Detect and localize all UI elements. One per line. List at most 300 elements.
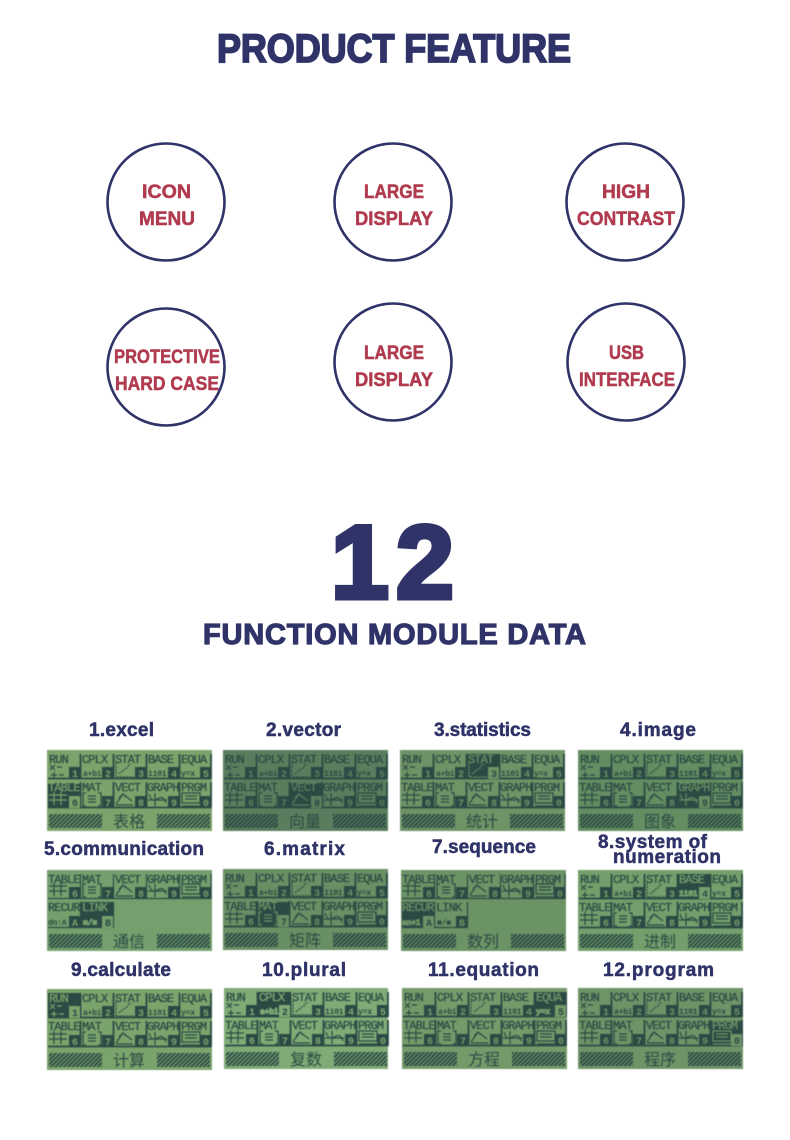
screen 8: system of numeration: 4 <box>702 890 708 901</box>
screen 9: calculate: 9 <box>171 1038 177 1049</box>
screen 10: plural: a+bi <box>260 1008 279 1017</box>
screen 3: statistics: 0 <box>556 799 562 810</box>
screen 7: sequence: B <box>459 919 465 930</box>
screen 11: equation: BASE <box>503 991 529 1005</box>
feature circle: protective hard case: HARD CASE <box>115 374 219 395</box>
caption 8: numeration <box>613 847 721 868</box>
screen 12: program: GRAPH <box>678 1019 710 1033</box>
screen 12: program: STAT <box>646 991 672 1005</box>
screen 8: system of numeration: 8 <box>669 919 675 930</box>
screen 1: excel: 4 <box>171 770 177 781</box>
screen 6: matrix: y=x <box>357 889 371 898</box>
screen 5: communication: ■/■ <box>83 919 97 928</box>
screen 7: sequence: TABLE <box>402 873 434 887</box>
feature circle: large display: LARGE <box>364 182 424 203</box>
screen 10: plural: STAT <box>292 991 318 1005</box>
screen 11: equation: VECT <box>470 1019 496 1033</box>
screen 9: calculate: 计算 <box>113 1051 145 1070</box>
big number 12: 1 <box>331 505 389 621</box>
screen 9: calculate: 8 <box>138 1038 144 1049</box>
screen 8: system of numeration: y=x <box>712 890 726 899</box>
screen 12: program: MAT <box>613 1019 633 1033</box>
screen 6: matrix: 矩阵 <box>289 932 321 950</box>
screen 1: excel: TABLE <box>48 781 80 795</box>
screen 10: plural: 4 <box>348 1008 354 1019</box>
screen 9: calculate: 3 <box>138 1009 144 1020</box>
screen 6: matrix: 9 <box>347 918 353 929</box>
screen 5: communication: B <box>105 919 111 930</box>
screen 10: plural: VECT <box>292 1019 318 1033</box>
caption 5: 5.communication <box>44 839 204 860</box>
screen 8: system of numeration: RUN <box>580 873 600 887</box>
screen 5: communication: PRGM <box>181 873 207 887</box>
subtitle: FUNCTION MODULE DATA <box>203 619 586 651</box>
screen 10: plural: 9 <box>348 1037 354 1048</box>
screen 12: program: PRGM <box>712 1019 738 1033</box>
screen 8: system of numeration: 5 <box>734 890 740 901</box>
screen 9: calculate: 1101 <box>148 1009 167 1018</box>
screen 11: equation: 方程 <box>468 1051 500 1069</box>
screen 6: matrix: GRAPH <box>323 900 355 914</box>
feature circle: high contrast <box>566 144 684 260</box>
screen 8: system of numeration: PRGM <box>712 901 738 915</box>
screen 1: excel: y=x <box>181 770 195 779</box>
screen 6: matrix: 7 <box>281 918 287 929</box>
screen 6: matrix: TABLE <box>224 900 256 914</box>
screen 1: excel: 6 <box>72 799 78 810</box>
screen 10: plural: 3 <box>315 1008 321 1019</box>
screen 9: calculate: 1 <box>72 1009 78 1020</box>
screen 8: system of numeration: 2 <box>636 890 642 901</box>
screen 9: calculate: PRGM <box>181 1020 207 1034</box>
screen 2: vector: STAT <box>291 753 317 767</box>
screen 3: statistics: 7 <box>458 799 464 810</box>
screen 4: image: CPLX <box>613 753 639 767</box>
feature circle: large display 2: LARGE <box>364 343 424 364</box>
screen 4: image: 5 <box>734 770 740 781</box>
screen 12: program: 6 <box>603 1037 609 1048</box>
screen 3: statistics: PRGM <box>534 781 560 795</box>
screen 6: matrix: 1101 <box>324 889 343 898</box>
screen 12: program: TABLE <box>579 1019 611 1033</box>
screen 11: equation: 3 <box>493 1008 499 1019</box>
screen 1: excel: GRAPH <box>147 781 179 795</box>
screen 11: equation: 1 <box>427 1008 433 1019</box>
caption 9: 9.calculate <box>71 960 171 981</box>
screen 11: equation: 2 <box>460 1008 466 1019</box>
screen 11: equation: MAT <box>437 1019 457 1033</box>
screen 6: matrix: 2 <box>281 889 287 900</box>
screen 3: statistics: EQUA <box>534 753 561 767</box>
screen 9: calculate: 4 <box>171 1009 177 1020</box>
screen 7: sequence: MAT <box>436 873 456 887</box>
screen 2: vector: 6 <box>248 799 254 810</box>
screen 8: system of numeration: GRAPH <box>678 901 710 915</box>
screen 6: matrix: BASE <box>324 872 350 886</box>
screen 1: excel: 7 <box>105 799 111 810</box>
screen 2: vector: 8 <box>314 799 320 810</box>
screen 11: equation: GRAPH <box>502 1019 534 1033</box>
screen 3: statistics: VECT <box>468 781 494 795</box>
screen 4: image: 1101 <box>679 770 698 779</box>
screen 2: vector: 9 <box>347 799 353 810</box>
screen 8: system of numeration: 7 <box>636 919 642 930</box>
screen 12: program: 4 <box>702 1008 708 1019</box>
screen 2: vector: MAT <box>258 781 278 795</box>
screen 11: equation: 5 <box>558 1008 564 1019</box>
caption 1: 1.excel <box>89 720 154 741</box>
screen 9: calculate: STAT <box>115 992 141 1006</box>
screen 12: program: EQUA <box>712 991 739 1005</box>
screen 9: calculate: 7 <box>105 1038 111 1049</box>
screen 12: program: 5 <box>734 1008 740 1019</box>
screen 11: equation: 4 <box>526 1008 532 1019</box>
screen 6: matrix: 4 <box>347 889 353 900</box>
caption 8: 8.system of <box>598 832 708 853</box>
screen 9: calculate: BASE <box>148 992 174 1006</box>
screen 12: program: y=x <box>712 1008 726 1017</box>
feature circle: icon menu <box>108 144 224 260</box>
feature circle: protective hard case: PROTECTIVE <box>114 347 220 368</box>
screen 4: image: 0 <box>734 799 740 810</box>
screen 11: equation: EQUA <box>536 991 563 1005</box>
screen 10: plural: 5 <box>380 1008 386 1019</box>
screen 7: sequence: PRGM <box>535 873 561 887</box>
screen 3: statistics: BASE <box>501 753 527 767</box>
screen 7: sequence: 数列 <box>467 933 499 951</box>
screen 1: excel: 0 <box>203 799 209 810</box>
screen 9: calculate: a+bi <box>83 1009 102 1018</box>
screen 1: excel: 3 <box>138 770 144 781</box>
screen 8: system of numeration: 1101 <box>679 890 698 899</box>
screen 7: sequence: A <box>426 919 432 930</box>
screen 7: sequence: an+1 <box>402 919 421 928</box>
screen 8: system of numeration: VECT <box>646 901 672 915</box>
screen 4: image: 8 <box>669 799 675 810</box>
screen 11: equation: a+bi <box>438 1008 457 1017</box>
screen 6: matrix: STAT <box>291 872 317 886</box>
screen 12: program: VECT <box>646 1019 672 1033</box>
screen 10: plural: CPLX <box>259 991 285 1005</box>
screen 4: image: GRAPH <box>678 781 710 795</box>
screen 4: image: 7 <box>636 799 642 810</box>
screen 6: matrix: EQUA <box>357 872 384 886</box>
screen 11: equation: 7 <box>460 1037 466 1048</box>
screen 5: communication: RECUR <box>48 901 80 915</box>
caption 8 <box>598 832 721 868</box>
screen 10: plural: EQUA <box>358 991 385 1005</box>
screen 11: equation: 0 <box>558 1037 564 1048</box>
screen 12: program: 7 <box>636 1037 642 1048</box>
screen 5: communication: GRAPH <box>147 873 179 887</box>
screen 8: system of numeration: 9 <box>702 919 708 930</box>
screen 7: sequence: VECT <box>469 873 495 887</box>
screen 6: matrix: a+bi <box>259 889 278 898</box>
screen 10: plural: 8 <box>315 1037 321 1048</box>
screen 7: sequence: RECUR <box>402 901 434 915</box>
screen 4: image: RUN <box>580 753 600 767</box>
screen 8: system of numeration: MAT <box>613 901 633 915</box>
feature circle: usb interface: INTERFACE <box>579 370 675 391</box>
feature circle: protective hard case <box>108 308 224 426</box>
screen 10: plural: 6 <box>249 1037 255 1048</box>
screen 9: calculate: 0 <box>203 1038 209 1049</box>
screen 8: system of numeration: STAT <box>646 873 672 887</box>
screen 2: vector: 1 <box>248 770 254 781</box>
screen 2: vector: GRAPH <box>323 781 355 795</box>
screen 4: image: 图象 <box>644 813 676 831</box>
screen 2: vector: a+bi <box>259 770 278 779</box>
screen 6: matrix <box>223 869 388 950</box>
screen 1: excel: 8 <box>138 799 144 810</box>
screen 2: vector: y=x <box>357 770 371 779</box>
screen 2: vector: EQUA <box>357 753 384 767</box>
screen 10: plural: 1101 <box>325 1008 344 1017</box>
screen 12: program: 3 <box>669 1008 675 1019</box>
screen 8: system of numeration: 进制 <box>644 933 676 951</box>
caption 12: 12.program <box>603 960 714 981</box>
screen 3: statistics: 1101 <box>501 770 520 779</box>
screen 8: system of numeration: 0 <box>734 919 740 930</box>
screen 11: equation: PRGM <box>536 1019 562 1033</box>
screen 3: statistics: 1 <box>425 770 431 781</box>
screen 12: program: CPLX <box>613 991 639 1005</box>
big number 12: 2 <box>396 505 454 621</box>
screen 6: matrix: PRGM <box>357 900 383 914</box>
screen 5: communication: LINK <box>82 901 109 915</box>
screen 6: matrix: 1 <box>248 889 254 900</box>
screen 10: plural: TABLE <box>225 1019 257 1033</box>
screen 11: equation: y=x <box>536 1008 550 1017</box>
screen 12: program: BASE <box>679 991 705 1005</box>
screen 7: sequence: ■/■ <box>437 919 451 928</box>
screen 5: communication: 7 <box>105 890 111 901</box>
caption 3: 3.statistics <box>434 720 531 741</box>
screen 11: equation: 1101 <box>503 1008 522 1017</box>
screen 11: equation: 9 <box>526 1037 532 1048</box>
screen 12: program: 程序 <box>644 1051 676 1069</box>
feature circle: usb interface <box>568 304 684 420</box>
screen 9: calculate: y=x <box>181 1009 195 1018</box>
screen 5: communication: VECT <box>115 873 141 887</box>
screen 12: program: 8 <box>669 1037 675 1048</box>
screen 9: calculate: GRAPH <box>147 1020 179 1034</box>
feature circle: large display <box>334 144 452 260</box>
screen 4: image: EQUA <box>712 753 739 767</box>
screen 7: sequence: 9 <box>525 890 531 901</box>
screen 1: excel: 表格 <box>113 813 145 831</box>
screen 1: excel: RUN <box>49 753 69 767</box>
screen 3: statistics: 9 <box>524 799 530 810</box>
screen 7: sequence: 0 <box>557 890 563 901</box>
screen 4: image: TABLE <box>579 781 611 795</box>
screen 2: vector <box>223 750 388 831</box>
feature circle: large display: DISPLAY <box>355 209 433 230</box>
screen 8: system of numeration <box>578 870 743 951</box>
screen 7: sequence: 7 <box>459 890 465 901</box>
screen 9: calculate: 6 <box>72 1038 78 1049</box>
screen 6: matrix: VECT <box>291 900 317 914</box>
screen 3: statistics: RUN <box>402 753 422 767</box>
screen 1: excel: 1101 <box>148 770 167 779</box>
screen 1: excel: MAT <box>82 781 102 795</box>
caption 6: 6.matrix <box>264 839 345 860</box>
screen 11: equation <box>402 988 567 1069</box>
screen 3: statistics: CPLX <box>435 753 461 767</box>
screen 2: vector: 向量 <box>289 813 321 831</box>
screen 10: plural: RUN <box>226 991 246 1005</box>
screen 5: communication: TABLE <box>48 873 80 887</box>
screen 12: program: a+bi <box>614 1008 633 1017</box>
screen 11: equation: CPLX <box>437 991 463 1005</box>
screen 4: image: 6 <box>603 799 609 810</box>
screen 2: vector: 7 <box>281 799 287 810</box>
screen 12: program: 1101 <box>679 1008 698 1017</box>
screen 5: communication: 8 <box>138 890 144 901</box>
screen 10: plural: BASE <box>325 991 351 1005</box>
screen 6: matrix: 6 <box>248 918 254 929</box>
screen 4: image <box>578 750 743 831</box>
screen 6: matrix: 8 <box>314 918 320 929</box>
screen 3: statistics: 统计 <box>466 813 498 831</box>
screen 12: program <box>578 988 743 1069</box>
screen 3: statistics: y=x <box>534 770 548 779</box>
screen 4: image: VECT <box>646 781 672 795</box>
screen 1: excel: STAT <box>115 753 141 767</box>
screen 3: statistics: 8 <box>491 799 497 810</box>
screen 2: vector: BASE <box>324 753 350 767</box>
screen 6: matrix: 5 <box>379 889 385 900</box>
screen 4: image: 4 <box>702 770 708 781</box>
screen 11: equation: RUN <box>404 991 424 1005</box>
screen 2: vector: CPLX <box>258 753 284 767</box>
screen 4: image: y=x <box>712 770 726 779</box>
screen 12: program: 2 <box>636 1008 642 1019</box>
screen 10: plural: PRGM <box>358 1019 384 1033</box>
screen 3: statistics: 6 <box>425 799 431 810</box>
screen 3: statistics: 3 <box>491 770 497 781</box>
screen 12: program: 1 <box>603 1008 609 1019</box>
screen 10: plural: GRAPH <box>324 1019 356 1033</box>
screen 10: plural: 复数 <box>290 1051 322 1069</box>
screen 7: sequence: 8 <box>492 890 498 901</box>
screen 5: communication: 通信 <box>113 933 145 951</box>
screen 12: program: 0 <box>734 1037 740 1048</box>
screen 9: calculate: TABLE <box>48 1020 80 1034</box>
screen 4: image: 3 <box>669 770 675 781</box>
screen 4: image: PRGM <box>712 781 738 795</box>
screen 5: communication: MAT <box>82 873 102 887</box>
screen 4: image: 1 <box>603 770 609 781</box>
title: PRODUCT FEATURE <box>217 27 571 71</box>
screen 7: sequence: 6 <box>426 890 432 901</box>
screen 3: statistics: a+bi <box>436 770 455 779</box>
screen 8: system of numeration: EQUA <box>712 873 739 887</box>
screen 2: vector: VECT <box>291 781 317 795</box>
screen 10: plural: MAT <box>259 1019 279 1033</box>
screen 1: excel: 9 <box>171 799 177 810</box>
caption 11: 11.equation <box>428 960 539 981</box>
screen 1: excel: 2 <box>105 770 111 781</box>
screen 8: system of numeration: 3 <box>669 890 675 901</box>
feature circle: large display 2: DISPLAY <box>355 370 433 391</box>
screen 10: plural: y=x <box>358 1008 372 1017</box>
screen 1: excel: BASE <box>148 753 174 767</box>
screen 1: excel <box>47 750 212 831</box>
screen 2: vector: TABLE <box>224 781 256 795</box>
screen 10: plural: 7 <box>282 1037 288 1048</box>
screen 5: communication: dn:A <box>48 919 67 928</box>
screen 7: sequence: LINK <box>436 901 463 915</box>
screen 3: statistics: TABLE <box>401 781 433 795</box>
screen 5: communication: 0 <box>203 890 209 901</box>
screen 4: image: a+bi <box>614 770 633 779</box>
screen 5: communication <box>47 870 212 951</box>
feature circle: large display 2 <box>334 304 452 420</box>
feature circle: icon menu: MENU <box>139 209 195 230</box>
screen 8: system of numeration: 1 <box>603 890 609 901</box>
screen 4: image: MAT <box>613 781 633 795</box>
screen 1: excel: VECT <box>115 781 141 795</box>
screen 1: excel: PRGM <box>181 781 207 795</box>
screen 8: system of numeration: a+bi <box>614 890 633 899</box>
screen 6: matrix: 3 <box>314 889 320 900</box>
screen 5: communication: A <box>72 919 78 930</box>
screen 4: image: 2 <box>636 770 642 781</box>
caption 10: 10.plural <box>262 960 346 981</box>
screen 2: vector: PRGM <box>357 781 383 795</box>
screen 10: plural <box>224 988 388 1069</box>
screen 9: calculate: RUN <box>49 992 69 1006</box>
screen 9: calculate: 5 <box>203 1009 209 1020</box>
screen 4: image: BASE <box>679 753 705 767</box>
screen 1: excel: 5 <box>203 770 209 781</box>
screen 3: statistics: GRAPH <box>500 781 532 795</box>
screen 9: calculate <box>47 989 212 1070</box>
screen 9: calculate: VECT <box>115 1020 141 1034</box>
screen 3: statistics: 5 <box>556 770 562 781</box>
screen 5: communication: 6 <box>72 890 78 901</box>
screen 1: excel: EQUA <box>181 753 208 767</box>
screen 9: calculate: 2 <box>105 1009 111 1020</box>
screen 8: system of numeration: BASE <box>679 873 705 887</box>
feature circle: usb interface: USB <box>609 343 644 364</box>
screen 11: equation: TABLE <box>403 1019 435 1033</box>
screen 12: program: RUN <box>580 991 600 1005</box>
screen 12: program: 9 <box>702 1037 708 1048</box>
screen 3: statistics: STAT <box>468 753 494 767</box>
screen 8: system of numeration: CPLX <box>613 873 639 887</box>
screen 3: statistics: 4 <box>524 770 530 781</box>
screen 9: calculate: MAT <box>82 1020 102 1034</box>
screen 11: equation: 6 <box>427 1037 433 1048</box>
screen 5: communication: 9 <box>171 890 177 901</box>
screen 6: matrix: CPLX <box>258 872 284 886</box>
screen 9: calculate: EQUA <box>181 992 208 1006</box>
screen 10: plural: 0 <box>380 1037 386 1048</box>
screen 4: image: 9 <box>702 799 708 810</box>
screen 6: matrix: RUN <box>225 872 245 886</box>
screen 9: calculate: CPLX <box>82 992 108 1006</box>
feature circle: high contrast: CONTRAST <box>577 209 675 230</box>
screen 2: vector: 5 <box>379 770 385 781</box>
screen 6: matrix: 0 <box>379 918 385 929</box>
screen 10: plural: 2 <box>282 1008 288 1019</box>
screen 3: statistics <box>400 750 565 831</box>
screen 6: matrix: MAT <box>258 900 278 914</box>
screen 1: excel: 1 <box>72 770 78 781</box>
feature circle: icon menu: ICON <box>142 182 191 203</box>
